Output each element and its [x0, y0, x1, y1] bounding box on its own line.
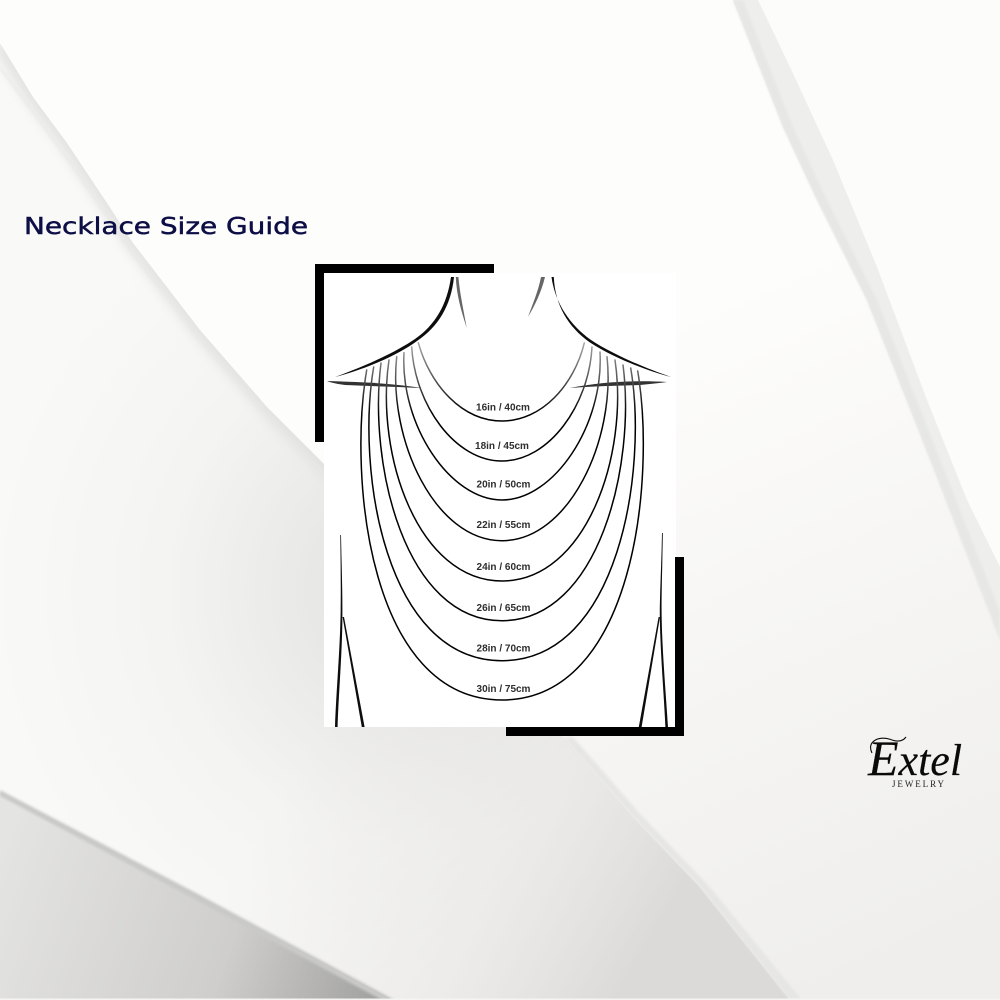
- neck and shoulder outline: [327, 277, 671, 727]
- necklace curves: [361, 343, 643, 700]
- black corner frame: top left: [315, 264, 494, 442]
- necklace length labels: 30in / 75cm: [477, 684, 531, 695]
- 20 inch curve: [404, 352, 600, 500]
- 28 inch curve: [369, 367, 635, 661]
- necklace length labels: 24in / 60cm: [477, 562, 531, 573]
- necklace length labels: 22in / 55cm: [477, 520, 531, 531]
- panel: necklace length chart: [315, 264, 684, 736]
- 18 inch curve: [412, 347, 592, 461]
- title: Necklace Size Guide: [24, 212, 308, 240]
- logo: Extel Jewelry: Extel: [867, 730, 962, 786]
- logo: Extel Jewelry: JEWELRY: [892, 779, 944, 789]
- 24 inch curve: [386, 360, 618, 581]
- necklace length labels: [475, 402, 531, 695]
- necklace length labels: 28in / 70cm: [477, 644, 531, 654]
- necklace length labels: 18in / 45cm: [475, 441, 529, 452]
- black corner frame: bottom right: [506, 557, 684, 736]
- 22 inch curve: [396, 357, 608, 541]
- necklace length labels: 20in / 50cm: [477, 480, 531, 490]
- 26 inch curve: [378, 363, 626, 621]
- necklace length labels: 26in / 65cm: [477, 603, 531, 614]
- 30 inch curve: [361, 370, 643, 700]
- 16 inch curve: [418, 343, 584, 421]
- necklace length labels: 16in / 40cm: [476, 402, 530, 414]
- white chart backing: [324, 273, 676, 727]
